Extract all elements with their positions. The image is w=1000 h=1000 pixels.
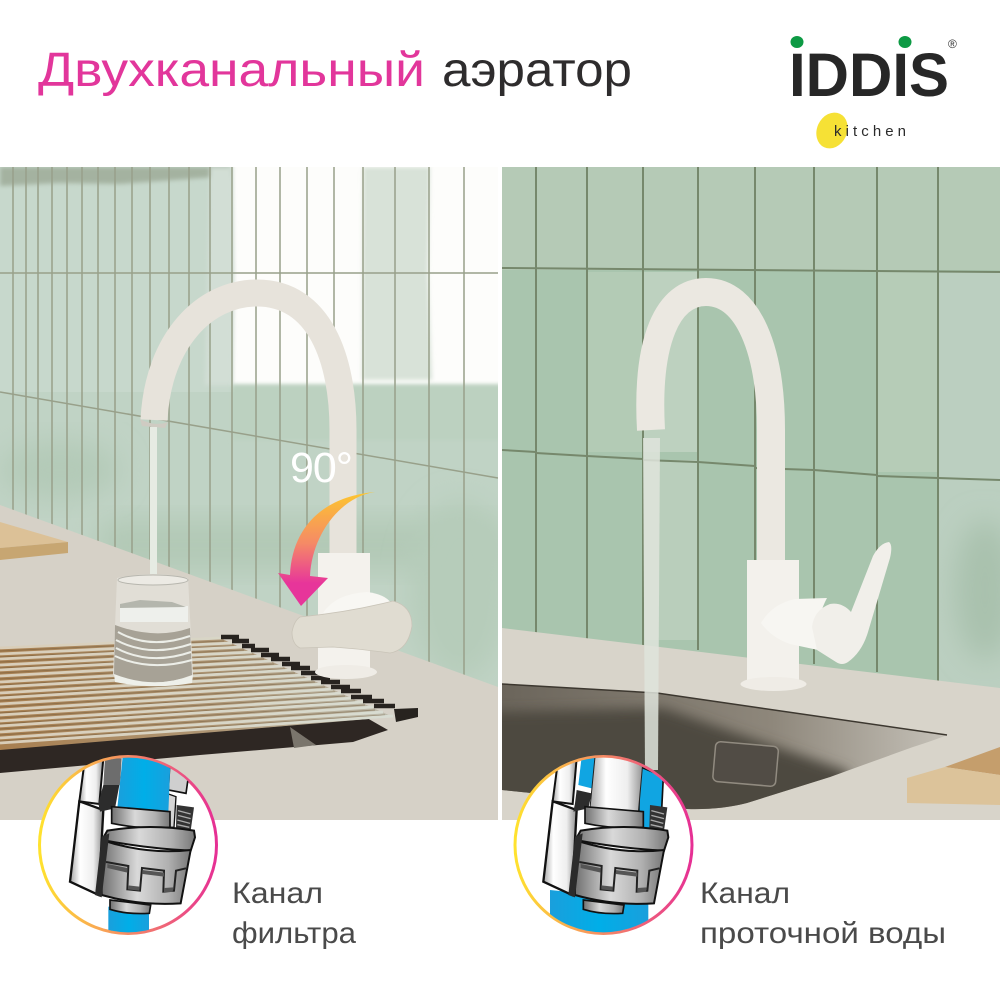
water stream left xyxy=(150,427,157,577)
inset: through-flow aerator xyxy=(515,756,692,937)
glass of water xyxy=(113,574,193,686)
inset circle left xyxy=(40,756,216,934)
registered mark: ® xyxy=(948,37,957,51)
inset circle right xyxy=(515,756,692,934)
label line two: проточной воды xyxy=(700,917,946,950)
logo green dot left xyxy=(790,36,804,48)
sink left xyxy=(0,718,388,773)
aerator illustration left xyxy=(70,757,195,935)
countertop right xyxy=(502,628,1000,820)
panel: left photo, filter channel xyxy=(0,160,512,820)
drying rack xyxy=(0,637,418,750)
kitchen wordmark: kitchen xyxy=(834,123,906,140)
wooden board left xyxy=(0,522,68,560)
panel: right photo, through-flow channel xyxy=(490,167,1000,820)
sink right xyxy=(502,683,948,810)
logo: IDDIS kitchen xyxy=(789,36,957,154)
90 degree label: 90° xyxy=(290,444,353,492)
inset: filter channel aerator xyxy=(40,756,216,935)
faucet left: handle xyxy=(292,601,412,653)
label line one: Канал xyxy=(700,877,790,910)
title dark part: аэратор xyxy=(442,44,632,97)
logo wordmark: IDDIS xyxy=(789,41,949,109)
label line two: фильтра xyxy=(232,917,356,950)
aerator illustration right xyxy=(543,757,668,937)
wooden board right xyxy=(907,747,1000,805)
title xyxy=(38,44,632,97)
title pink part: Двухканальный xyxy=(38,44,425,97)
tiled wall right xyxy=(502,167,1000,692)
faucet left: base xyxy=(315,553,392,679)
faucet right: handle xyxy=(799,542,892,664)
yellow blob xyxy=(811,107,853,154)
tiled wall left xyxy=(0,160,512,697)
faucet right: spout xyxy=(650,292,771,565)
water stream right xyxy=(643,438,660,770)
label: filter channel xyxy=(232,877,356,950)
faucet left: spout xyxy=(140,293,343,560)
label line one: Канал xyxy=(232,877,323,910)
rotation arrow xyxy=(278,492,375,606)
countertop left xyxy=(0,505,498,820)
logo green dot right xyxy=(898,36,912,48)
faucet right: base xyxy=(740,560,806,691)
label: through-flow channel xyxy=(700,877,946,950)
